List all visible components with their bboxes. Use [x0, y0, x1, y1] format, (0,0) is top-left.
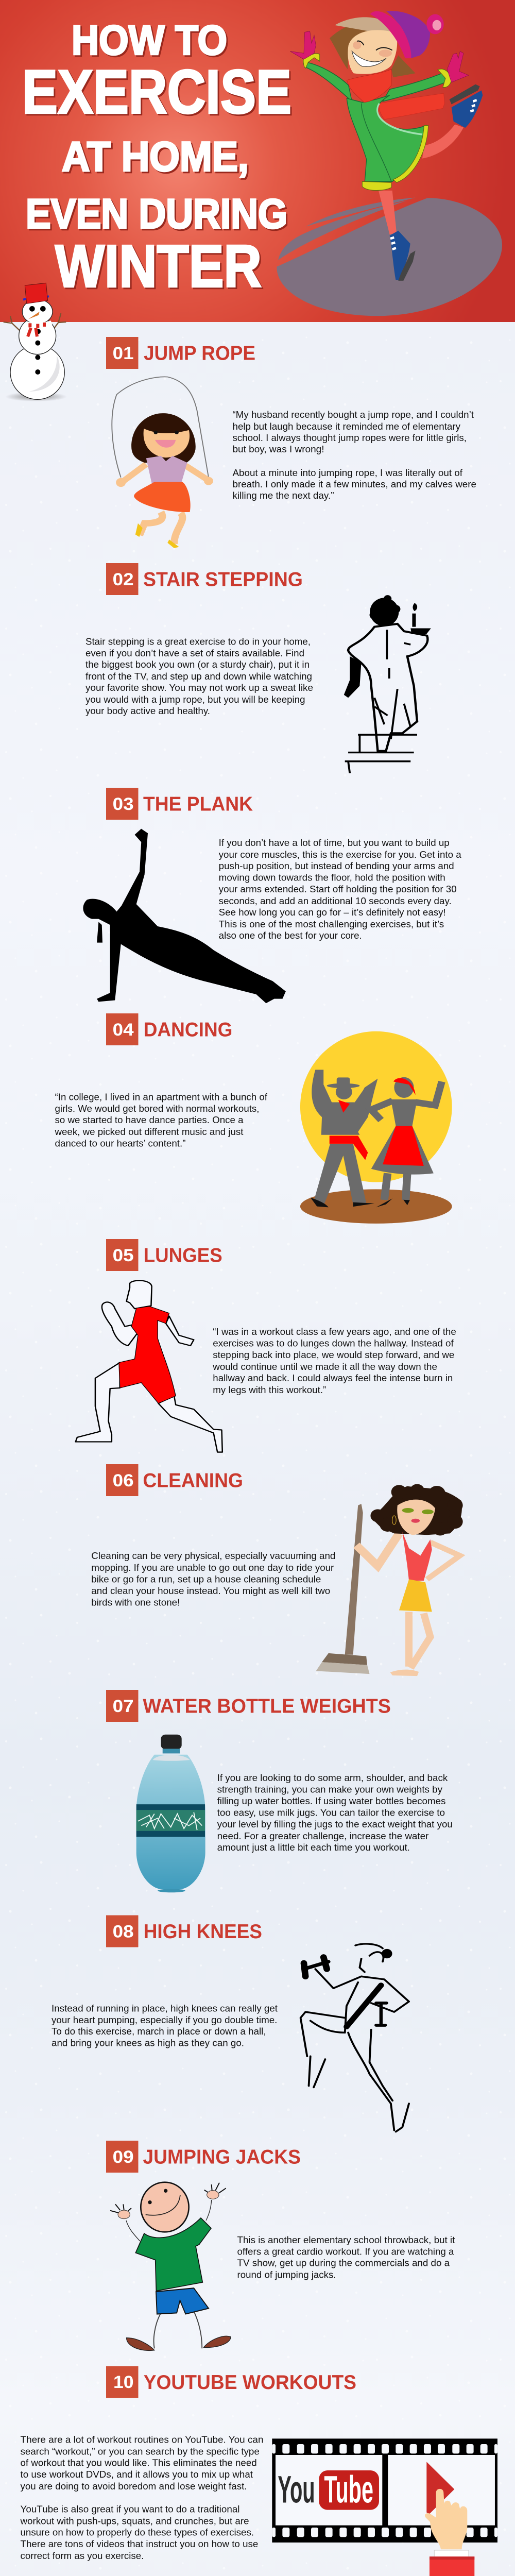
text: dancing quote: girls. We would get bored with normal workouts,	[55, 1104, 260, 1114]
text: stair stepping: Stair stepping is a great exercise to do in your home,	[85, 637, 311, 647]
heading 01: JUMP ROPE	[144, 342, 255, 365]
text: youtube workouts: There are tons of videos that instruct you on how to use	[21, 2539, 258, 2549]
text: stair stepping: even if you don’t have a set of stairs available. Find	[85, 648, 304, 658]
text: water bottle weights: If you are looking to do some arm, shoulder, and back	[217, 1773, 448, 1783]
illustration: jumping boy shorts and legs	[127, 2288, 231, 2350]
text: youtube workouts: YouTube is also great if you want to do a traditional	[21, 2504, 240, 2515]
heading 06	[106, 1464, 243, 1496]
text: high knees	[52, 2003, 278, 2048]
section 8: high knees	[52, 1916, 409, 2132]
heading 08	[106, 1916, 262, 1947]
illustration: snowman	[4, 283, 67, 401]
text: the plank: This is one of the most challenging exercises, but it’s	[219, 919, 444, 929]
text: jumping jacks: This is another elementary school throwback, but it	[237, 2235, 455, 2245]
text: cleaning	[91, 1551, 335, 1607]
heading 07	[106, 1690, 391, 1722]
text: water bottle weights: filling up water bottles. If using water bottles becomes	[217, 1796, 445, 1806]
text: jump rope quote	[233, 410, 476, 501]
illustration: child climbing stairs	[344, 595, 431, 773]
hat	[370, 11, 444, 58]
text: the plank: If you don’t have a lot of time, but you want to build up	[219, 838, 450, 848]
film strip	[272, 2438, 497, 2543]
hair	[330, 19, 393, 69]
face	[348, 30, 397, 74]
section 10: youtube workouts	[20, 2366, 497, 2576]
face and buttons	[28, 306, 46, 375]
text: jumping jacks: TV show, get up during the commercials and do a	[237, 2258, 450, 2268]
text: lunges quote: would continue until we made it all the way down the	[212, 1362, 437, 1372]
text: lunges quote: stepping back into place, we would step forward, and we	[213, 1350, 454, 1360]
heading 04: DANCING	[144, 1019, 233, 1041]
heading 04: 04	[113, 1020, 134, 1040]
text: stair stepping: the biggest book you own (or a sturdy chair), put it in	[85, 659, 310, 670]
heading 06: CLEANING	[143, 1469, 243, 1492]
heading 02: STAIR STEPPING	[143, 569, 303, 590]
text: high knees: Instead of running in place, high knees can really get	[52, 2003, 278, 2013]
illustration: woman with broom	[316, 1484, 463, 1676]
heading 04	[106, 1013, 233, 1045]
heading 02: 02	[113, 570, 134, 589]
illustration: girl jumping rope	[112, 377, 213, 548]
heading 02	[106, 563, 303, 595]
text: lunges quote	[212, 1327, 456, 1395]
text: high knees: your heart pumping, especially if you go double time.	[52, 2015, 277, 2025]
text: jump rope quote: breath. I only made it a few minutes, and my calves were	[233, 479, 476, 489]
illustration: dancing couple	[300, 1031, 452, 1224]
text: jump rope quote: school. I always thought jump ropes were for little girls,	[233, 433, 467, 443]
heading 01: 01	[113, 344, 134, 363]
heading 10: YOUTUBE WORKOUTS	[144, 2371, 356, 2394]
heading 09: 09	[113, 2147, 134, 2167]
illustration: ice skater girl	[277, 11, 502, 316]
text: cleaning: and clean your house instead. You might as well kill two	[91, 1586, 330, 1596]
coat	[305, 62, 445, 181]
hand and sleeve	[425, 2489, 474, 2576]
text: water bottle weights: too easy, use milk jugs. You can tailor the exercise to	[217, 1807, 445, 1818]
text: the plank: seconds, and add an additional 10 seconds every day.	[219, 896, 452, 906]
text: water bottle weights	[217, 1773, 453, 1853]
text: water bottle weights: need. For a greater challenge, increase the water	[217, 1831, 428, 1841]
YouTube logo	[278, 2467, 379, 2511]
section 9: jumping jacks	[106, 2141, 455, 2350]
heading 01	[106, 337, 255, 369]
text: the plank: moving down towards the floor, hold the position with	[219, 873, 445, 883]
section 6: cleaning	[91, 1464, 463, 1676]
text: youtube workouts: you are doing to avoid boredom and lose weight fast.	[21, 2481, 247, 2492]
illustration: brush-stroke runner with dumbbells	[301, 1944, 409, 2132]
text: water bottle weights: amount just a little bit each time you workout.	[217, 1842, 410, 1853]
section 5: lunges	[76, 1239, 456, 1452]
text: the plank: your arms extended. Start off holding the position for 30	[219, 884, 457, 894]
title	[22, 18, 291, 300]
text: cleaning: bike or go for a run, set up a house cleaning schedule	[91, 1574, 321, 1585]
text: the plank: push-up position, but instead of bending your arms and	[219, 861, 454, 871]
text: youtube workouts	[20, 2435, 263, 2561]
text: dancing quote: so we started to have dance parties. Once a	[55, 1115, 244, 1125]
coat trim	[303, 54, 452, 191]
title: WINTER	[55, 233, 262, 300]
text: youtube workouts: unsure on how to properly do these types of exercises.	[21, 2527, 254, 2537]
YouTube logo: You	[278, 2467, 315, 2511]
text: jump rope quote: but boy, was I wrong!	[233, 444, 324, 454]
section 3: the plank	[83, 788, 462, 1003]
woman	[371, 1077, 442, 1200]
text: stair stepping: you would with a jump rope, but you will be keeping	[85, 694, 305, 705]
text: stair stepping: your body active and healthy.	[85, 706, 210, 716]
text: lunges quote: hallway and back. I could always feel the intense burn in	[213, 1373, 453, 1383]
text: lunges quote: my legs with this workout.”	[213, 1385, 326, 1395]
standing leg and skate	[379, 191, 416, 281]
text: jumping jacks: round of jumping jacks.	[237, 2269, 336, 2280]
heading 07: WATER BOTTLE WEIGHTS	[143, 1695, 391, 1718]
heading 03: THE PLANK	[143, 793, 253, 815]
text: cleaning: mopping. If you are unable to go out one day to ride your	[91, 1563, 334, 1573]
scarf tail	[379, 93, 444, 120]
text: stair stepping: your favorite show. You may not work up a sweat like	[85, 683, 313, 693]
text: high knees: To do this exercise, march in place or down a hall,	[52, 2026, 266, 2037]
text: dancing quote: week, we picked out different music and just	[54, 1127, 243, 1137]
play triangle	[426, 2462, 454, 2514]
text: jump rope quote: killing me the next day.”	[233, 490, 334, 501]
scarf	[347, 69, 391, 103]
section 1: jump rope	[106, 337, 476, 548]
text: the plank: your core muscles, this is the exercise for you. Get into a	[219, 850, 462, 860]
text: lunges quote: “I was in a workout class a few years ago, and one of the	[213, 1327, 456, 1337]
heading 10: 10	[113, 2372, 134, 2392]
title: AT HOME,	[62, 134, 249, 180]
ice patch	[277, 197, 502, 316]
section 2: stair stepping	[85, 563, 431, 773]
heading 07: 07	[113, 1697, 134, 1716]
text: dancing quote: “In college, I lived in an apartment with a bunch of	[55, 1092, 268, 1103]
illustration: film strip with YouTube logo and pointing hand	[272, 2438, 497, 2576]
heading 05: LUNGES	[144, 1245, 222, 1266]
heading 03: 03	[113, 794, 134, 814]
text: youtube workouts: search “workout,” or you can search by the specific type	[21, 2446, 260, 2456]
heading 08: HIGH KNEES	[144, 1921, 262, 1943]
text: water bottle weights: your level by filling the jugs to the exact weight that you	[217, 1819, 453, 1829]
illustration: side plank silhouette	[83, 829, 286, 1003]
heading 05: 05	[113, 1246, 134, 1265]
YouTube logo: Tube	[324, 2467, 373, 2511]
body	[10, 299, 64, 399]
heading 09	[106, 2141, 301, 2173]
title: EVEN DURING	[26, 191, 287, 237]
heading 03	[106, 788, 253, 820]
text: youtube workouts: There are a lot of workout routines on YouTube. You can	[21, 2435, 263, 2445]
text: jump rope quote: help but laugh because it reminded me of elementary	[233, 421, 460, 432]
text: youtube workouts: of workout that you would like. This eliminates the need	[21, 2458, 257, 2468]
hat	[23, 283, 49, 303]
title: EXERCISE	[22, 58, 291, 127]
text: jump rope quote: About a minute into jumping rope, I was literally out of	[233, 468, 463, 478]
text: cleaning: birds with one stone!	[91, 1597, 180, 1607]
illustration: runner in red lunging	[76, 1281, 222, 1452]
text: water bottle weights: strength training, you can make your own weights by	[217, 1785, 442, 1795]
text: lunges quote: exercises was to do lunges down the hallway. Instead of	[213, 1338, 454, 1349]
text: high knees: and bring your knees as high as they can go.	[52, 2038, 244, 2048]
illustration: water bottle	[136, 1735, 205, 1892]
text: stair stepping: front of the TV, and step up and down while watching	[85, 671, 312, 682]
text: jump rope quote: “My husband recently bought a jump rope, and I couldn’t	[233, 410, 474, 420]
title: HOW TO	[72, 18, 227, 64]
text: stair stepping	[85, 637, 313, 716]
text: the plank	[219, 838, 462, 941]
heading 09: JUMPING JACKS	[143, 2146, 301, 2168]
heading 10	[106, 2366, 356, 2398]
header panel	[0, 0, 515, 322]
text: jumping jacks: offers a great cardio workout. If you are watching a	[237, 2247, 455, 2257]
raised leg and skate	[422, 84, 483, 159]
scarf	[26, 323, 52, 336]
man	[311, 1070, 410, 1207]
text: youtube workouts: workout with push-ups, squats, and crunches, but are	[20, 2516, 249, 2526]
section 4: dancing	[54, 1013, 452, 1224]
arms	[4, 313, 66, 331]
heading 05	[106, 1239, 222, 1271]
text: cleaning: Cleaning can be very physical, especially vacuuming and	[91, 1551, 335, 1561]
heading 08: 08	[113, 1922, 134, 1941]
text: youtube workouts: correct form as you exercise.	[21, 2551, 144, 2561]
text: the plank: See how long you can go for – it’s definitely not easy!	[219, 907, 446, 918]
gloves	[290, 31, 469, 82]
illustration: jumping boy upper body	[110, 2182, 226, 2291]
text: youtube workouts: to use workout DVDs, and it allows you to mix up what	[21, 2469, 253, 2480]
text: dancing quote: danced to our hearts’ content.”	[55, 1139, 186, 1149]
text: jumping jacks	[237, 2235, 455, 2280]
text: the plank: also one of the best for your core.	[219, 930, 362, 941]
heading 06: 06	[113, 1471, 134, 1490]
section 7: water bottle weights	[106, 1690, 453, 1892]
text: dancing quote	[54, 1092, 268, 1149]
